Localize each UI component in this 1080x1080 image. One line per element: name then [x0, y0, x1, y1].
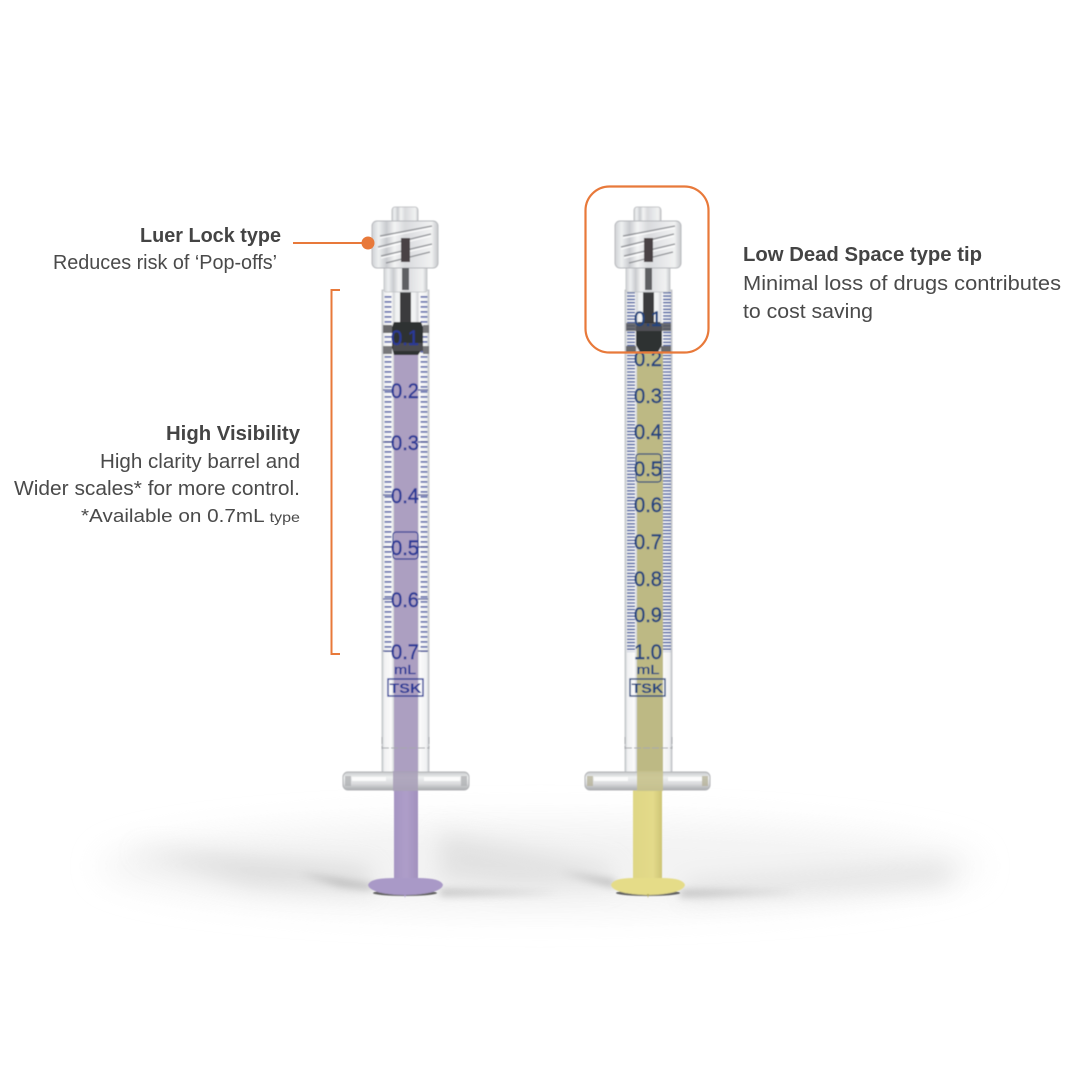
purple plunger foot — [368, 878, 443, 898]
yellow mL label: mL — [636, 662, 660, 677]
floor shadow — [100, 820, 980, 912]
purple scale numbers: 0.3 — [391, 432, 419, 455]
text: low dead space type tip: to cost saving — [743, 301, 873, 323]
purple liquid column — [394, 355, 418, 780]
purple stopper — [383, 322, 429, 355]
purple 0.5 box — [393, 532, 418, 559]
text: high visibility: Wider scales* for more control. — [14, 478, 300, 500]
yellow 0.5 box — [636, 454, 661, 482]
syringe: purple 0.7mL — [343, 207, 469, 898]
text: high visibility — [14, 423, 301, 526]
yellow scale numbers: 0.4 — [634, 421, 662, 444]
text: high visibility: *Available on 0.7mL type — [81, 506, 300, 526]
yellow finger flange — [585, 771, 710, 791]
purple scale numbers: 0.5 — [391, 537, 419, 560]
yellow scale numbers: 0.2 — [634, 348, 662, 371]
bracket: high visibility range — [332, 290, 340, 654]
yellow plunger rod — [633, 788, 662, 882]
yellow scale ticks — [631, 292, 667, 652]
purple TSK logo: TSK — [390, 680, 422, 696]
yellow needle core — [643, 290, 654, 326]
text: luer lock type: Reduces risk of ‘Pop-offs’ — [53, 252, 277, 274]
text: low dead space type tip: Minimal loss of drugs contributes — [743, 273, 1061, 295]
purple scale numbers: 0.6 — [391, 589, 419, 612]
purple scale ticks — [383, 296, 428, 652]
callout: luer lock leader line and dot — [293, 236, 374, 250]
yellow scale numbers: 0.5 — [634, 458, 662, 481]
purple scale numbers: 0.4 — [391, 485, 419, 508]
yellow barrel — [625, 290, 672, 776]
purple barrel — [382, 290, 429, 776]
yellow scale numbers — [634, 308, 662, 664]
purple luer lock hub — [372, 207, 438, 292]
text: low dead space type tip — [743, 244, 1061, 323]
yellow scale numbers: 0.6 — [634, 494, 662, 517]
purple scale numbers: 0.7 — [391, 641, 419, 664]
yellow luer lock hub — [615, 207, 681, 292]
purple barrel ring — [382, 737, 429, 749]
yellow scale numbers: 0.9 — [634, 604, 662, 627]
text: high visibility: High clarity barrel and — [100, 451, 300, 473]
text: high visibility: High Visibility — [166, 423, 301, 445]
purple mL label: mL — [394, 662, 416, 677]
syringe: yellow 1.0mL — [585, 207, 710, 898]
purple needle core — [400, 290, 411, 326]
yellow TSK logo: TSK — [632, 680, 664, 696]
purple scale numbers — [391, 327, 419, 664]
yellow plunger foot — [611, 878, 685, 898]
yellow liquid column — [637, 352, 663, 780]
text: low dead space type tip: Low Dead Space type tip — [743, 244, 982, 266]
purple plunger rod — [394, 788, 418, 882]
purple finger flange — [343, 771, 469, 791]
text: luer lock type — [53, 225, 281, 274]
yellow scale numbers: 0.8 — [634, 568, 662, 591]
yellow scale numbers: 0.1 — [634, 308, 662, 331]
yellow scale numbers: 0.7 — [634, 531, 662, 554]
purple scale numbers: 0.2 — [391, 380, 419, 403]
callout box: low dead space tip — [586, 186, 708, 352]
text: luer lock type: Luer Lock type — [140, 225, 281, 247]
purple scale numbers: 0.1 — [391, 327, 419, 350]
yellow scale numbers: 1.0 — [634, 641, 662, 664]
yellow barrel ring — [625, 737, 672, 749]
yellow stopper — [626, 322, 671, 353]
yellow scale numbers: 0.3 — [634, 385, 662, 408]
